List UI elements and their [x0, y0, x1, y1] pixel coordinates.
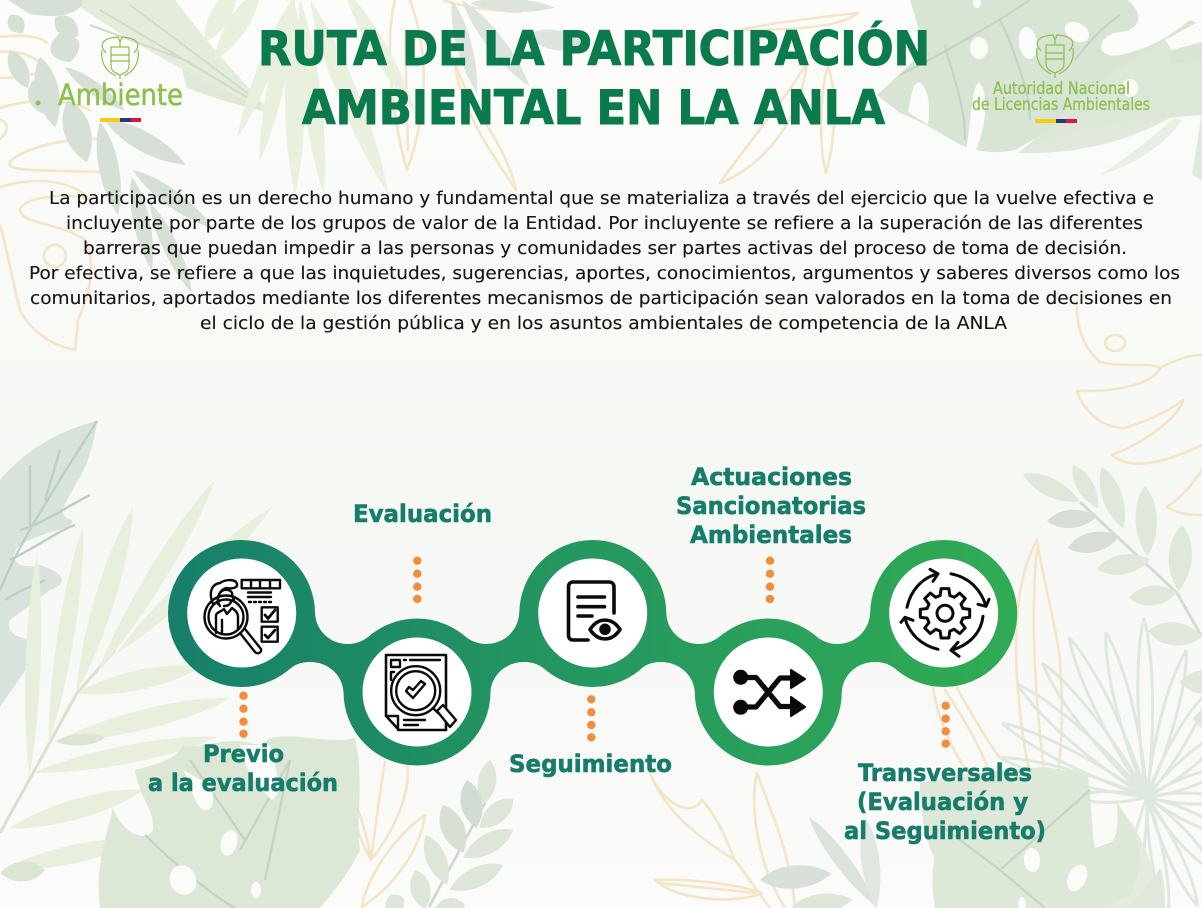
- connector dots: Transversales: [942, 702, 950, 748]
- intro text block: [29, 188, 1180, 334]
- background: lower-left feather leaf: [0, 421, 97, 707]
- title: AMBIENTAL EN LA ANLA: [302, 81, 886, 136]
- background: right fan palm: [998, 618, 1202, 908]
- text: Ambiente: Ambiente: [58, 78, 183, 112]
- connector dots: Evaluación: [413, 556, 421, 603]
- icon: Colombian crest, Ambiente: [102, 37, 138, 79]
- title: RUTA DE LA PARTICIPACIÓN: [258, 22, 930, 77]
- step 5 icon disc: [889, 558, 998, 668]
- label: Actuaciones Sancionatorias Ambientales: [676, 463, 866, 549]
- logo: Ministerio de Ambiente: [36, 37, 183, 122]
- intro text block: Por efectiva, se refiere a que las inquietudes, sugerencias, aportes, conocimientos, argumentos y saberes diversos como los: [29, 263, 1180, 284]
- flag bar: [1035, 119, 1077, 123]
- background: top-right palm leaves: [1017, 112, 1202, 180]
- background: top centre grey leaves: [445, 0, 588, 95]
- logo: ANLA: [972, 35, 1150, 123]
- icon: document under magnifier with check: [386, 655, 456, 730]
- label: Transversales (Evaluación y al Seguimiento): [844, 759, 1046, 845]
- label: Transversales (Evaluación y al Seguimiento): (Evaluación y: [857, 788, 1028, 816]
- connector dots: Actuaciones: [766, 556, 774, 603]
- connector dots: Previo: [239, 692, 248, 738]
- label: Seguimiento: Seguimiento: [509, 750, 672, 778]
- background: bottom-centre grey leaves: [759, 813, 885, 908]
- title: [258, 22, 930, 136]
- label: Actuaciones Sancionatorias Ambientales: Sancionatorias: [676, 492, 866, 520]
- connector dots: Seguimiento: [587, 695, 596, 742]
- icon: gear with cycle arrows: [901, 569, 989, 656]
- label: Previo a la evaluación: Previo: [203, 740, 284, 768]
- background: lower-left palm frond: [0, 475, 278, 883]
- label: Transversales (Evaluación y al Seguimiento): Transversales: [858, 759, 1032, 787]
- intro text block: La participación es un derecho humano y fundamental que se materializa a través del ejercicio que la vuelve efectiva e: [49, 188, 1154, 209]
- label: Actuaciones Sancionatorias Ambientales: Actuaciones: [691, 463, 852, 491]
- icon: crossing arrows: [733, 670, 805, 716]
- background: lower-left monstera: [99, 736, 360, 908]
- step 2 icon disc: [362, 638, 472, 746]
- step 3 icon disc: [538, 558, 647, 668]
- background: bottom-centre olive branch: [381, 759, 519, 908]
- intro text block: comunitarios, aportados mediante los diferentes mecanismos de participación sean valorados en la toma de decisiones en: [30, 288, 1172, 309]
- flag bar: [100, 118, 141, 122]
- label: Previo a la evaluación: a la evaluación: [148, 769, 338, 797]
- label: Actuaciones Sancionatorias Ambientales: Ambientales: [690, 521, 852, 549]
- background: top-left olive branch: [2, 0, 218, 296]
- intro text block: incluyente por parte de los grupos de valor de la Entidad. Por incluyente se refiere a la superación de las diferentes: [66, 213, 1143, 234]
- text: Autoridad Nacional: Autoridad Nacional: [993, 79, 1130, 98]
- label: Transversales (Evaluación y al Seguimiento): al Seguimiento): [844, 817, 1046, 845]
- background: top palm fronds: [196, 0, 422, 198]
- label: Evaluación: Evaluación: [353, 500, 492, 528]
- background: top-left striped leaf: [72, 0, 273, 113]
- icon: person under magnifier with checklist: [204, 580, 280, 653]
- icon: document with eye: [568, 582, 620, 640]
- route ribbon: [168, 540, 1017, 766]
- icon: Colombian crest, ANLA: [1037, 35, 1073, 78]
- background: top-right monstera: [877, 0, 1202, 152]
- background: right olive branch: [1019, 461, 1202, 731]
- text: de Licencias Ambientales: de Licencias Ambientales: [972, 95, 1150, 114]
- step 4 icon disc: [714, 638, 823, 746]
- label: Previo a la evaluación: [148, 740, 338, 797]
- intro text block: barreras que puedan impedir a las personas y comunidades ser partes activas del proceso de toma de decisión.: [83, 238, 1127, 259]
- intro text block: el ciclo de la gestión pública y en los asuntos ambientales de competencia de la ANLA: [200, 313, 1008, 334]
- step 1 icon disc: [187, 558, 296, 668]
- background: lower-right monstera: [920, 767, 1165, 908]
